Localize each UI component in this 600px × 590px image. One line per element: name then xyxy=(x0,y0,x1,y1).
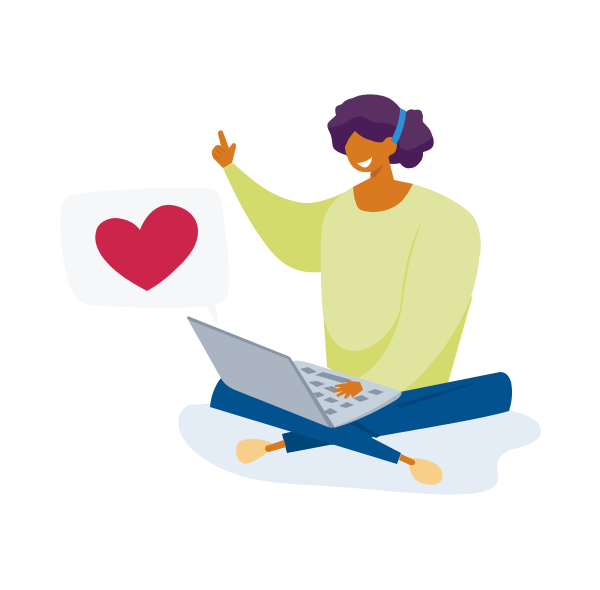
icon: raised hand xyxy=(212,130,236,168)
leg crease xyxy=(395,382,475,408)
left foot xyxy=(236,439,286,464)
icon: typing hand xyxy=(333,379,363,399)
sweater sleeve xyxy=(359,220,480,392)
laptop keyboard base xyxy=(293,361,401,427)
screen edge xyxy=(187,316,334,428)
sweater torso xyxy=(323,215,472,394)
raised arm sleeve xyxy=(223,163,355,272)
shin crease xyxy=(349,421,380,438)
hair xyxy=(327,94,434,168)
laptop xyxy=(187,316,402,428)
speech bubble xyxy=(60,188,229,327)
headband xyxy=(391,108,406,145)
icon: heart xyxy=(95,205,198,291)
smile xyxy=(357,157,372,167)
keyboard edge xyxy=(334,392,402,428)
collar xyxy=(353,180,413,212)
laptop screen xyxy=(187,318,333,428)
back leg xyxy=(300,372,512,445)
neck xyxy=(353,152,413,205)
right foot xyxy=(399,454,443,485)
face xyxy=(345,131,397,172)
back leg shin xyxy=(282,422,345,453)
fringe shadow xyxy=(340,142,347,146)
front leg xyxy=(210,375,401,464)
ground blob xyxy=(178,395,541,494)
neck shadow xyxy=(370,163,382,178)
sweater chest xyxy=(321,184,481,351)
keyboard keys xyxy=(300,367,384,415)
